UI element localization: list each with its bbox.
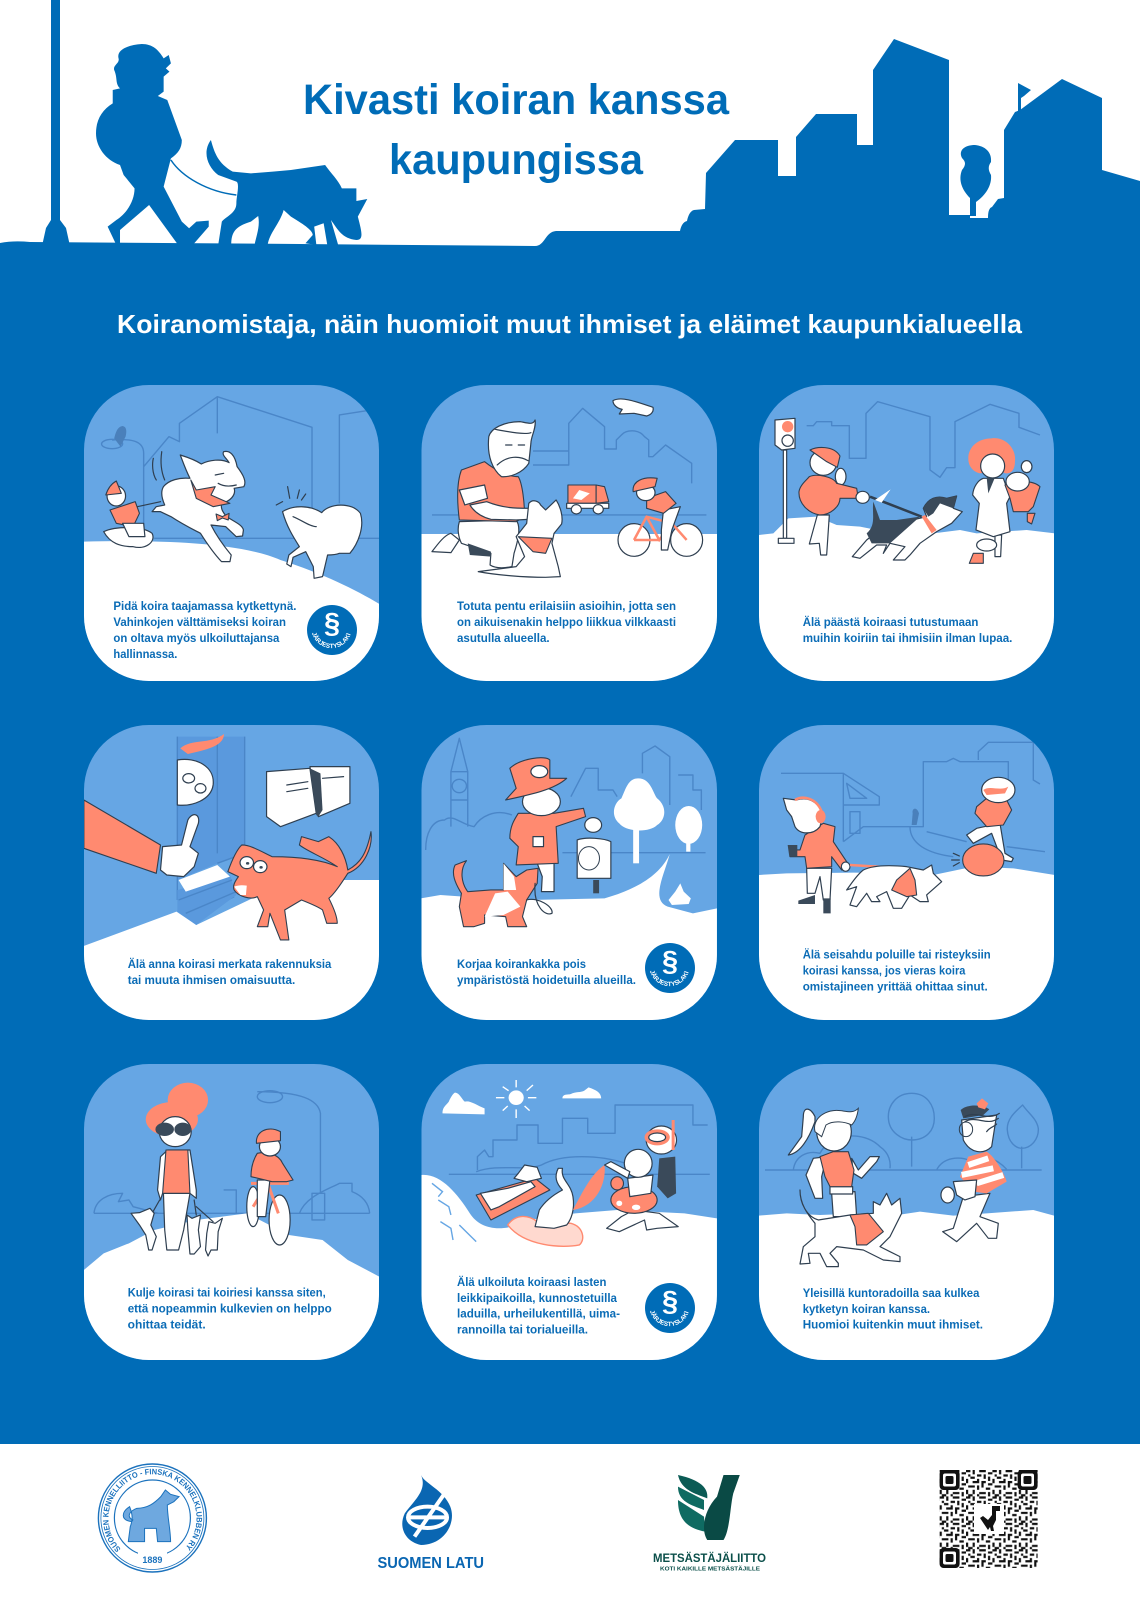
- ground and city silhouette: [0, 39, 1140, 300]
- clouds and sun: [442, 1080, 601, 1118]
- text: hallinnassa.: [113, 647, 177, 661]
- plane: [613, 399, 653, 416]
- badge: järjestyslaki: §: [324, 608, 340, 640]
- text: Korjaa koirankakka pois: [457, 957, 586, 971]
- puppy with harness: [478, 500, 562, 577]
- text: ohittaa teidät.: [128, 1318, 206, 1332]
- card 9: public fitness trails: [759, 1064, 1054, 1361]
- footer logo: Suomen Kennelliitto: 1889: [142, 1555, 162, 1565]
- poop: [669, 883, 691, 905]
- footer logo: Metsästäjäliitto: KOTI KAIKILLE METSÄSTÄJILLE: [660, 1566, 761, 1573]
- text: on oltava myös ulkoiluttajansa: [113, 631, 280, 645]
- skyline: [807, 402, 1040, 477]
- text: [128, 958, 332, 984]
- bag dispenser: [577, 838, 611, 893]
- cyclist: [618, 478, 703, 556]
- card 5: pick up dog poop: [422, 725, 717, 1020]
- text: rannoilla tai torialueilla.: [457, 1323, 588, 1337]
- subtitle: Koiranomistaja, näin huomioit muut ihmiset ja eläimet kaupunkialueella: [117, 309, 1023, 339]
- badge: järjestyslaki: [307, 605, 357, 655]
- card 8: do not walk dog on playgrounds and beaches: [422, 1064, 717, 1360]
- delivery truck: [567, 485, 609, 514]
- white dog with harness: [800, 1190, 902, 1267]
- arm with glove: [84, 800, 199, 877]
- text: [128, 1286, 332, 1332]
- QR code: [940, 1470, 1038, 1568]
- background buildings and lamp: [102, 397, 379, 540]
- text: Älä anna koirasi merkata rakennuksia: [128, 957, 332, 971]
- white beach: [421, 1175, 717, 1362]
- skyline and hills: [449, 1105, 710, 1174]
- man with dog on leash: [952, 777, 1015, 876]
- badge: järjestyslaki: [645, 1283, 695, 1333]
- leash: [171, 160, 236, 195]
- lamp post: [42, 0, 70, 246]
- white trees: [614, 778, 702, 863]
- coral dog: [228, 832, 371, 940]
- badge: järjestyslaki: [645, 943, 695, 993]
- text: Älä päästä koiraasi tutustumaan: [803, 615, 978, 629]
- badge: järjestyslaki: JÄRJESTYSLAKI: [650, 1310, 689, 1326]
- building corner: [177, 737, 245, 917]
- corgi: [453, 861, 552, 927]
- footer logo: Suomen Latu: [378, 1475, 484, 1572]
- text: [803, 947, 991, 993]
- photographer with striped sweater: [941, 1098, 1007, 1242]
- background lamp and bushes: [94, 1091, 370, 1220]
- white dog with harness: [847, 865, 942, 908]
- text: että nopeammin kulkevien on helppo: [128, 1302, 332, 1316]
- black and white dog: [852, 489, 962, 560]
- text: asutulla alueella.: [457, 631, 550, 645]
- traffic light: [775, 418, 795, 543]
- text: Huomioi kuitenkin muut ihmiset.: [803, 1318, 983, 1332]
- text: laduilla, urheilukentillä, uima-: [457, 1307, 620, 1321]
- dinosaur: [974, 1504, 1004, 1534]
- card 3: do not let dog greet without permission: [759, 385, 1054, 681]
- clock: [452, 779, 466, 793]
- card 4: do not mark buildings: [84, 725, 379, 1022]
- text: ympäristöstä hoidetuilla alueilla.: [457, 973, 636, 987]
- steps: [177, 865, 236, 925]
- footer logo: Suomen Latu: SUOMEN LATU: [378, 1555, 484, 1572]
- badge: järjestyslaki: §: [662, 946, 678, 978]
- text: Älä seisahdu poluille tai risteyksiin: [803, 947, 991, 961]
- text: [457, 1275, 620, 1337]
- woman with sunglasses: [146, 1083, 208, 1250]
- text: [457, 601, 676, 642]
- card 2: puppy socialisation: [421, 385, 718, 682]
- owner in coral jacket: [799, 447, 869, 555]
- title: [303, 76, 730, 184]
- text: leikkipaikoilla, kunnostetuilla: [457, 1291, 617, 1305]
- small fluffy dog: [276, 487, 362, 578]
- text: muihin koiriin tai ihmisiin ilman lupaa.: [803, 631, 1012, 645]
- white ground: [84, 1213, 379, 1362]
- text: omistajineen yrittää ohittaa sinut.: [803, 979, 988, 993]
- person silhouette: [96, 44, 209, 245]
- title: kaupungissa: [389, 136, 644, 184]
- white ground: [84, 541, 379, 682]
- sunbather on towel: [476, 1165, 550, 1220]
- tree silhouette: [960, 145, 991, 216]
- peeking face with hair: [177, 734, 224, 805]
- text: Vahinkojen välttämiseksi koiran: [113, 615, 286, 629]
- text: [803, 615, 1012, 645]
- children with swim ring: [605, 1120, 678, 1232]
- text: on aikuisenakin helppo liikkua vilkkaasti: [457, 615, 676, 629]
- leash: [850, 865, 907, 868]
- flag: [1018, 83, 1031, 112]
- card 6: do not stop on paths: [759, 725, 1054, 1021]
- text: [457, 957, 636, 987]
- white ground: [421, 534, 718, 682]
- dog silhouette: [206, 140, 367, 245]
- text: Pidä koira taajamassa kytkettynä.: [113, 599, 296, 613]
- background trees: [765, 1093, 1042, 1170]
- text: Kulje koirasi tai koiriesi kanssa siten,: [128, 1286, 326, 1300]
- skyline with big ben: [426, 738, 706, 853]
- woman holding child: [968, 438, 1040, 563]
- title: Kivasti koiran kanssa: [303, 76, 730, 124]
- queen with poop bag: [506, 758, 602, 892]
- badge: järjestyslaki: JÄRJESTYSLAKI: [312, 632, 351, 648]
- text: Älä ulkoiluta koiraasi lasten: [457, 1275, 606, 1289]
- text: koirasi kanssa, jos vieras koira: [803, 963, 966, 977]
- child on bicycle: [247, 1129, 293, 1245]
- leash: [870, 497, 922, 517]
- footer logo: Metsästäjäliitto: METSÄSTÄJÄLIITTO: [653, 1552, 766, 1565]
- text: tai muuta ihmisen omaisuutta.: [128, 973, 295, 987]
- man kneeling: [432, 420, 538, 568]
- footer logo: Metsästäjäliitto: [653, 1475, 766, 1573]
- text: Totuta pentu erilaisiin asioihin, jotta sen: [457, 599, 676, 613]
- three dogs: [131, 1200, 222, 1256]
- white ground: [759, 517, 1054, 681]
- card 7: walk so others can pass: [84, 1064, 379, 1362]
- boy with headphones: [783, 798, 850, 913]
- text: [803, 1286, 983, 1332]
- badge: järjestyslaki: §: [662, 1286, 678, 1318]
- dragged owner: [104, 481, 153, 547]
- running white dog: [137, 451, 245, 562]
- skyline: [432, 408, 706, 515]
- text: Yleisillä kuntoradoilla saa kulkea: [803, 1286, 980, 1300]
- digging dog and sand: [508, 1165, 605, 1246]
- jogging woman: [788, 1108, 879, 1217]
- badge: järjestyslaki: JÄRJESTYSLAKI: [650, 970, 689, 986]
- card 1: leash: [84, 385, 379, 681]
- electricity meters: [267, 767, 350, 827]
- background buildings: [781, 742, 1045, 857]
- finder squares: [940, 1470, 1038, 1568]
- white ground: [759, 1210, 1054, 1361]
- text: kytketyn koiran kanssa.: [803, 1302, 930, 1316]
- white ground: [759, 867, 1054, 1021]
- white ground: [421, 854, 717, 1022]
- footer logo: Suomen Kennelliitto: SUOMEN KENNELLIITTO - FINSKA KENNELKLUBBEN RY: [102, 1468, 202, 1552]
- text: [113, 599, 296, 661]
- white ground: [84, 880, 379, 1022]
- water waves: [432, 1183, 476, 1242]
